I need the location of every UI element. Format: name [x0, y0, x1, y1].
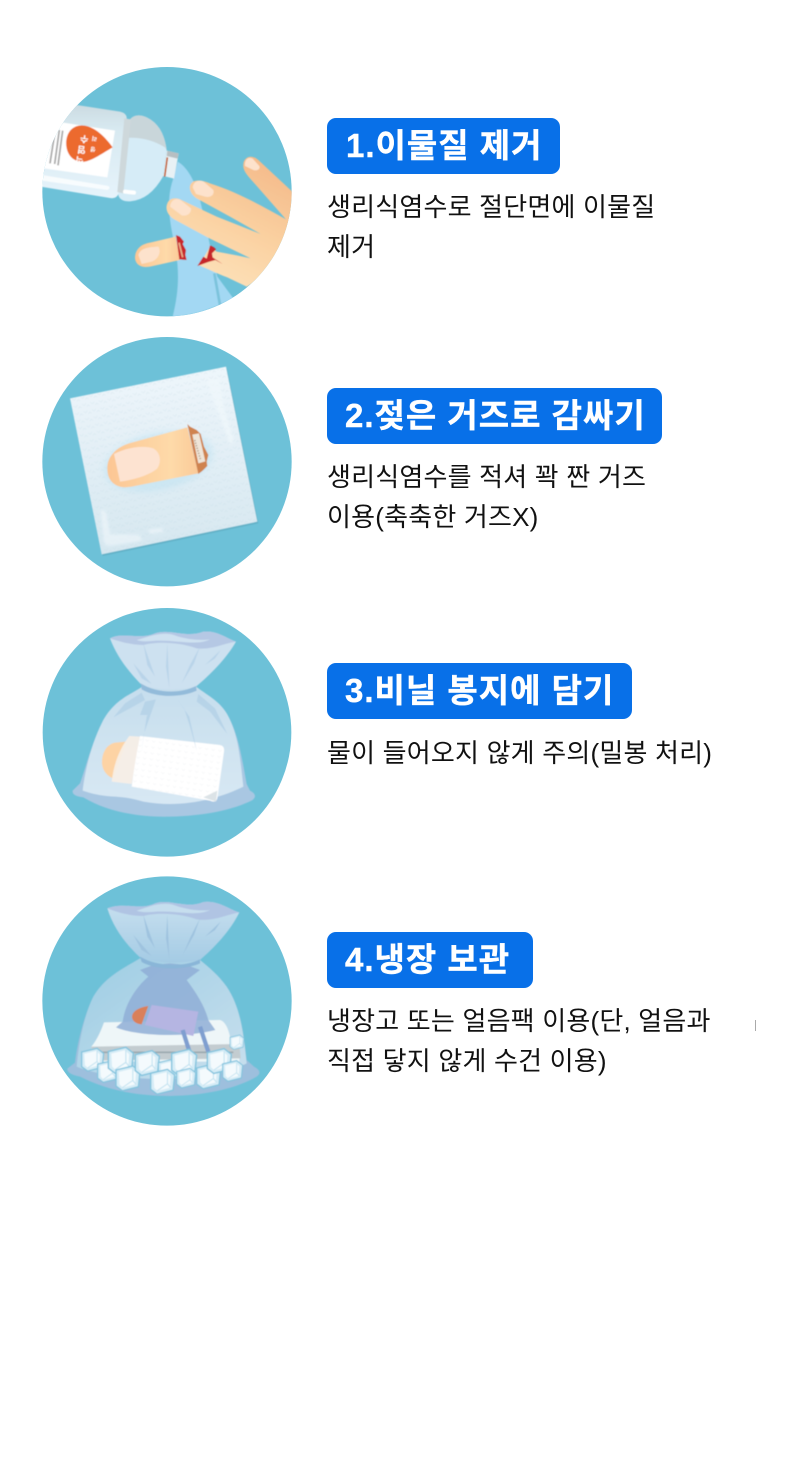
text: step 1 description: 제거: [327, 232, 375, 262]
bag tie: [140, 957, 200, 968]
text: step 2 description: [327, 462, 646, 532]
badge: step 2 title: [327, 388, 662, 444]
blood: [176, 235, 187, 260]
gauze: [70, 367, 258, 556]
panel: step 2 wrap in wet gauze: [42, 337, 662, 586]
panel: step 4 refrigerate: [42, 876, 711, 1126]
text: step 3 description: 물이 들어오지 않게 주의(밀봉 처리): [327, 738, 712, 768]
text: step 1 description: [327, 192, 655, 262]
hand: [166, 157, 297, 287]
inner bag: [116, 963, 215, 1053]
badge: step 1 title: 1.이물질 제거: [346, 127, 542, 164]
bag body: [73, 686, 255, 817]
label text: 수: [79, 133, 89, 144]
badge: step 4 title: [327, 932, 533, 988]
finger: [107, 424, 208, 487]
text: step 1 description: 생리식염수로 절단면에 이물질: [327, 192, 655, 222]
bag mouth: [107, 902, 239, 963]
text: step 2 description: 생리식염수를 적셔 꽉 짠 거즈: [327, 462, 646, 492]
badge: step 2 title: 2.젖은 거즈로 감싸기: [345, 397, 646, 434]
icon: bag on ice pack with ice cubes: [42, 876, 292, 1126]
badge: step 1 title: [327, 118, 560, 174]
label text: 리: [91, 134, 98, 143]
text: step 2 description: 이용(축축한 거즈X): [327, 502, 539, 532]
text: step 4 description: [327, 1006, 711, 1076]
severed fingertip: [135, 237, 180, 267]
badge: step 4 title: 4.냉장 보관: [345, 941, 510, 978]
badge: step 3 title: [327, 663, 632, 719]
label text: 생: [90, 145, 96, 154]
water stream: [169, 162, 233, 317]
bottle label: [37, 123, 115, 177]
outer bag body: [67, 958, 259, 1096]
ice pack: [91, 1020, 241, 1062]
icon: finger on wet gauze: [42, 337, 292, 586]
icon: gauze-wrapped finger in plastic bag: [42, 608, 292, 857]
text: step 4 description: 직접 닿지 않게 수건 이용): [327, 1046, 607, 1076]
bag mouth: [110, 631, 236, 689]
bag tie: [141, 683, 197, 696]
icon: saline bottle rinsing severed finger: [42, 67, 292, 316]
panel: step 3 put in plastic bag: [42, 608, 712, 857]
text: step 4 description: 냉장고 또는 얼음팩 이용(단, 얼음과: [327, 1006, 711, 1036]
ice cubes: [82, 1035, 244, 1094]
bag folds: [113, 693, 227, 755]
label text: [76, 134, 98, 162]
label text: 식: [75, 155, 84, 167]
bottle: [37, 100, 179, 201]
badge: step 3 title: 3.비닐 봉지에 담기: [345, 672, 614, 709]
panel: step 1 remove debris: [42, 67, 655, 316]
gauze roll with finger: [102, 736, 224, 802]
label text: 염: [77, 144, 86, 156]
